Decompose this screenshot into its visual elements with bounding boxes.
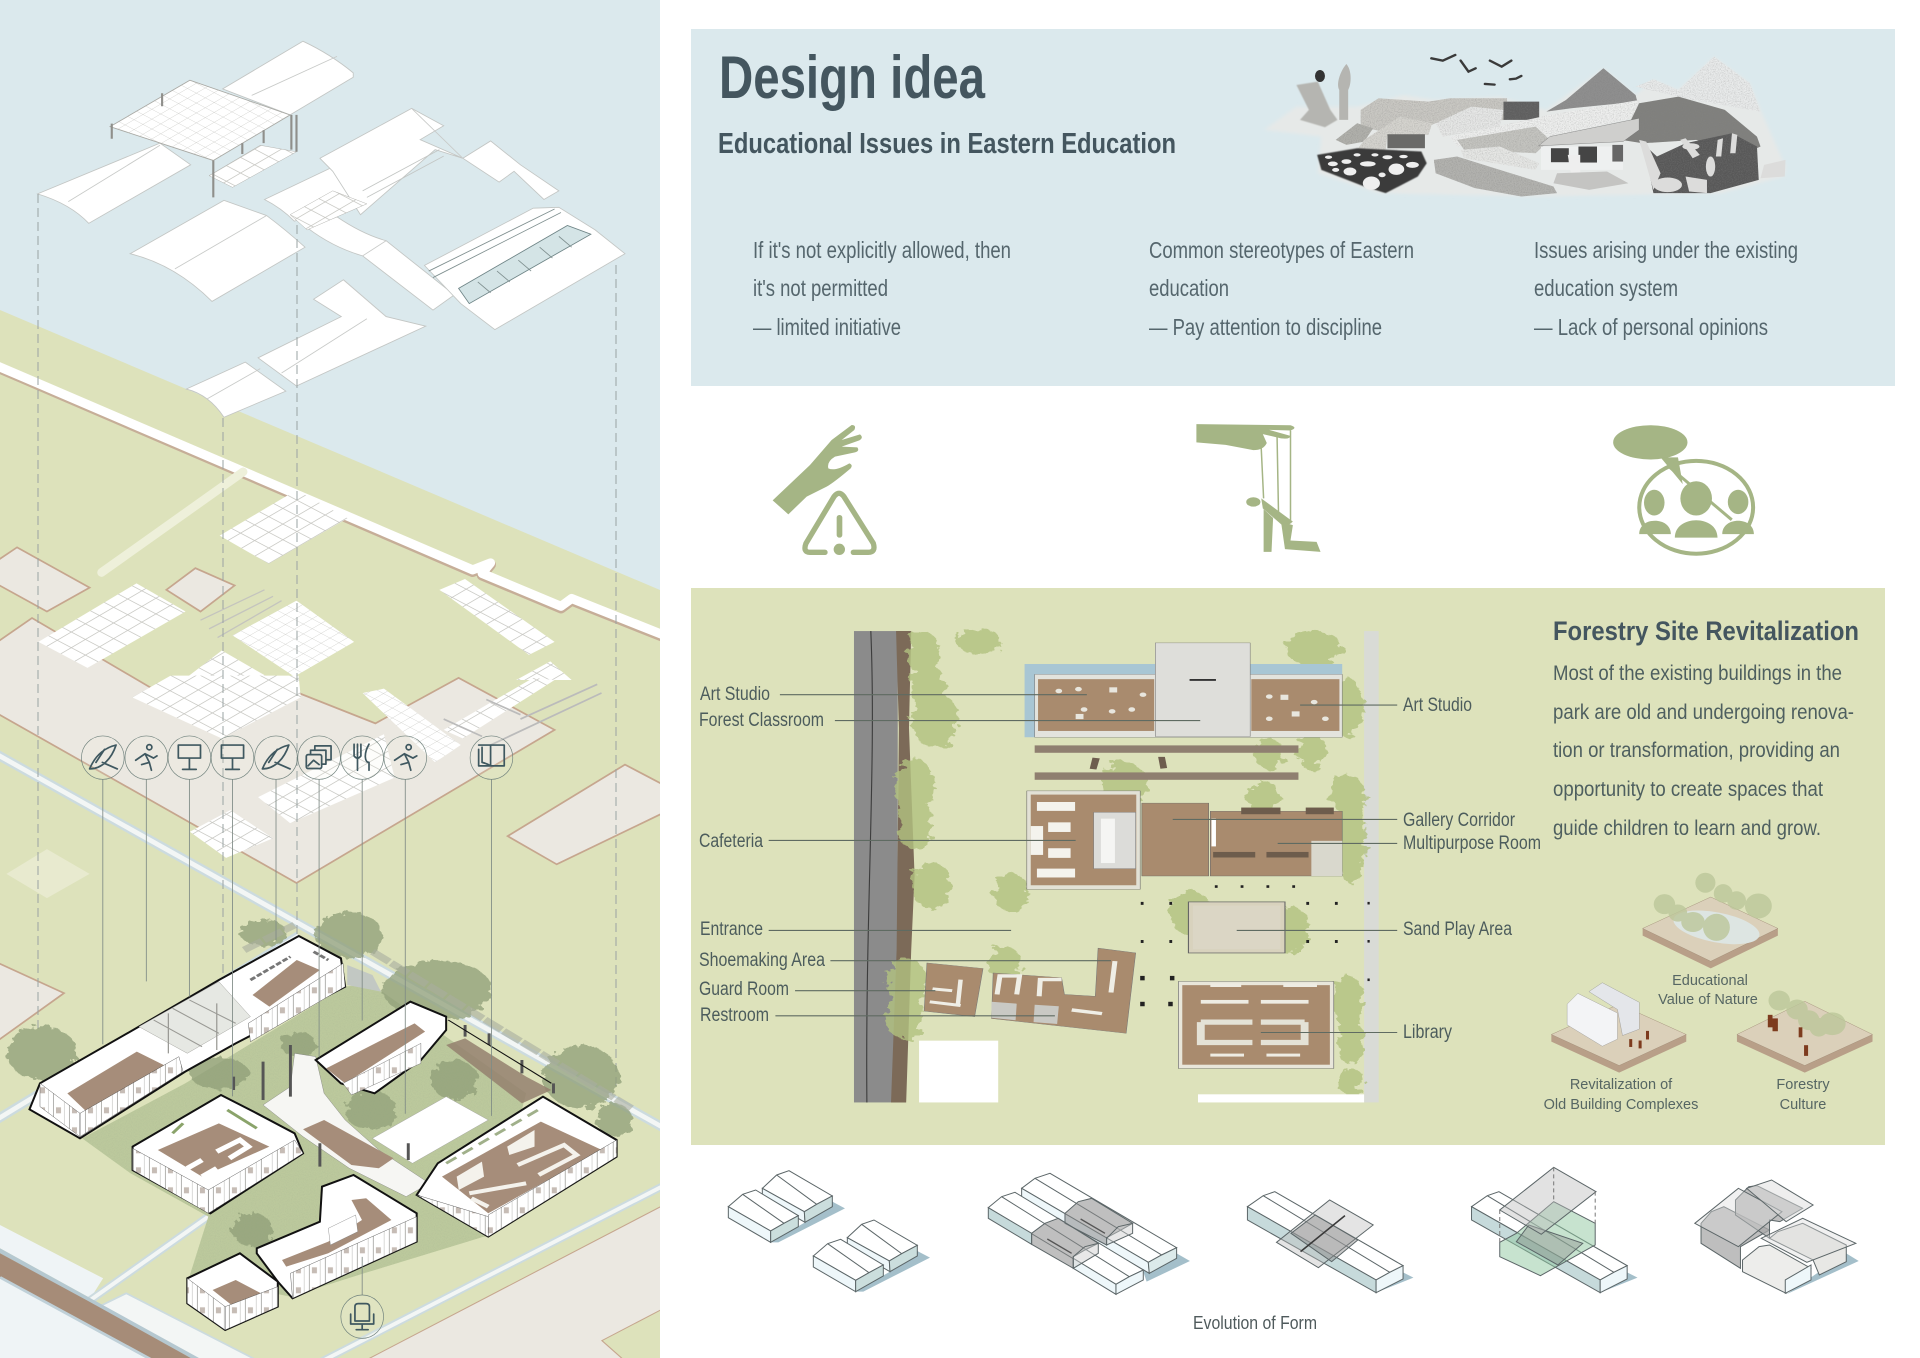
- roof: L wing: [258, 280, 426, 386]
- column 1: — limited initiative: [753, 314, 901, 340]
- site plan: [769, 628, 1397, 1102]
- mist base: [1264, 57, 1786, 197]
- roof layer: [38, 41, 625, 417]
- step 2: [988, 1173, 1190, 1294]
- roof: long eastern wing: [320, 108, 559, 215]
- concept captions: Culture: [1780, 1097, 1826, 1113]
- trees on plan: [885, 628, 1365, 1094]
- concept captions: [1544, 973, 1830, 1113]
- concept captions: Old Building Complexes: [1544, 1097, 1698, 1113]
- icon: puppet on strings: [1196, 424, 1321, 552]
- column 3: [1534, 237, 1798, 340]
- road: [854, 631, 898, 1102]
- building: library wing: [417, 1097, 617, 1237]
- roof: top wing: [223, 41, 353, 115]
- column dots: [1140, 885, 1370, 1006]
- function icons: [81, 736, 513, 1338]
- raised hands crowd: [1639, 133, 1759, 193]
- forestry paragraph: Most of the existing buildings in the: [1553, 662, 1842, 685]
- panel: forestry site revitalization: [691, 588, 1885, 1145]
- icon: speech bubble crossed over group: [1613, 425, 1754, 554]
- multipurpose room: [1210, 808, 1342, 876]
- tree canopy: [1621, 97, 1761, 153]
- forestry heading: Forestry Site Revitalization: [1553, 616, 1859, 646]
- forestry paragraph: tion or transformation, providing an: [1553, 739, 1840, 762]
- panel: exploded axonometric drawing: [0, 0, 683, 1358]
- roof: small wing: [186, 362, 286, 417]
- pergola grids, upper: [38, 80, 572, 680]
- concept diagrams: [1551, 873, 1873, 1073]
- crowd figures: [1639, 133, 1786, 193]
- forestry paragraph: opportunity to create spaces that: [1553, 778, 1823, 801]
- gallery corridor: [1142, 803, 1209, 876]
- left room labels: Entrance: [700, 919, 763, 940]
- column 3: Issues arising under the existing: [1534, 237, 1798, 263]
- right room labels: Gallery Corridor: [1403, 810, 1516, 831]
- roof: spine: [264, 168, 348, 222]
- grass: [82, 983, 526, 1297]
- ground plane: [0, 310, 660, 1358]
- column 1: If it's not explicitly allowed, then: [753, 237, 1011, 263]
- dashed projection lines: [38, 194, 616, 1090]
- classroom crowd: [1317, 148, 1427, 193]
- mountains: [1546, 68, 1637, 112]
- step 1: [728, 1171, 930, 1292]
- guard room block: [924, 963, 983, 1017]
- photo collage: [1264, 55, 1786, 197]
- diagram: old buildings: [1551, 983, 1686, 1073]
- column 3: — Lack of personal opinions: [1534, 314, 1768, 340]
- column 3: education system: [1534, 275, 1678, 301]
- site context upper: [0, 365, 665, 638]
- right room labels: Multipurpose Room: [1403, 833, 1541, 854]
- library block: [1178, 981, 1334, 1068]
- roof: connector: [307, 217, 454, 310]
- trees: [8, 912, 632, 1247]
- right room labels: Sand Play Area: [1403, 919, 1512, 940]
- east path: [1364, 631, 1379, 1102]
- subtitle: Educational Issues in Eastern Education: [718, 128, 1176, 160]
- plan labels: [699, 684, 1541, 1043]
- building: entrance hall and courtyard: [234, 1025, 553, 1197]
- title: Design idea: [719, 44, 985, 111]
- left room labels: Guard Room: [699, 979, 789, 1000]
- pergola grids, lower: [132, 676, 602, 858]
- cafeteria block: [1027, 791, 1140, 889]
- right room labels: Library: [1403, 1022, 1452, 1043]
- column 2: — Pay attention to discipline: [1149, 314, 1382, 340]
- building: top-left wing: [29, 936, 345, 1138]
- shoemaking block: [991, 948, 1136, 1033]
- building: guard room: [187, 1253, 278, 1330]
- diagram: nature: [1643, 873, 1778, 968]
- sky background: [0, 0, 660, 590]
- concept captions: Forestry: [1776, 1077, 1830, 1093]
- blackboard: [1387, 134, 1425, 148]
- column 1: it's not permitted: [753, 275, 888, 301]
- embankment: [891, 631, 915, 1102]
- function leader lines: [81, 736, 513, 1338]
- building: central block: [133, 1095, 303, 1213]
- issue statements: [753, 237, 1798, 340]
- roof: west wing: [38, 143, 191, 223]
- left room labels: Shoemaking Area: [699, 950, 825, 971]
- left room labels: Forest Classroom: [699, 710, 824, 731]
- evolution caption: Evolution of Form: [1193, 1313, 1317, 1333]
- birds: [1431, 55, 1521, 85]
- concept captions: Revitalization of: [1570, 1077, 1673, 1093]
- building: north-east wing: [316, 1002, 551, 1103]
- step 3: [1247, 1192, 1413, 1293]
- white cutouts: [919, 1041, 998, 1102]
- rail strips: [1035, 745, 1298, 780]
- evolution of form diagrams: [728, 1167, 1859, 1294]
- left room labels: Cafeteria: [699, 831, 763, 852]
- column 2: education: [1149, 275, 1229, 301]
- lower site context: [0, 1181, 673, 1358]
- building: shoemaking wing: [257, 1175, 417, 1298]
- ground floor axonometric: [0, 912, 673, 1358]
- step 5: [1695, 1180, 1859, 1294]
- column 1: [753, 237, 1011, 340]
- forestry paragraph: guide children to learn and grow.: [1553, 817, 1821, 840]
- roof: central block: [130, 200, 305, 301]
- diagram: forestry culture: [1737, 991, 1873, 1073]
- art studio block: [1025, 643, 1342, 737]
- panel: design idea header: [691, 29, 1895, 386]
- icon: hand over warning sign: [773, 425, 874, 555]
- roof: skylit wing: [424, 207, 625, 330]
- forestry paragraph: [1553, 662, 1854, 840]
- step 4: [1472, 1167, 1638, 1293]
- column 2: [1149, 237, 1414, 340]
- left room labels: Art Studio: [700, 684, 770, 705]
- concept captions: Value of Nature: [1658, 992, 1758, 1008]
- plan leader lines: [769, 695, 1397, 1033]
- locomotive and hills: [1503, 102, 1539, 120]
- railway: [1434, 157, 1557, 197]
- icon glyphs: [90, 744, 504, 1330]
- woman and chair: [1296, 82, 1337, 127]
- hedge along road: [244, 925, 631, 1108]
- left room labels: [699, 684, 825, 1026]
- concept captions: Educational: [1672, 973, 1748, 989]
- left room labels: Restroom: [700, 1005, 769, 1026]
- right room labels: Art Studio: [1403, 695, 1472, 716]
- right room labels: [1403, 695, 1541, 1043]
- school house: [1538, 118, 1639, 146]
- sand play area: [1188, 902, 1285, 953]
- site context lower: [0, 618, 683, 1129]
- forestry paragraph: park are old and undergoing renova-: [1553, 701, 1854, 724]
- column 2: Common stereotypes of Eastern: [1149, 237, 1414, 263]
